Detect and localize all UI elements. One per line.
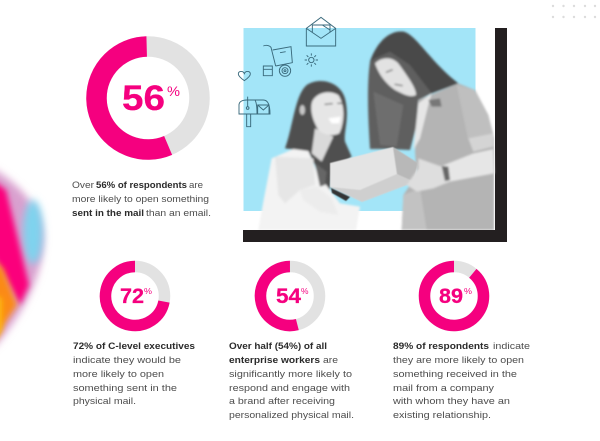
text: enterprise workers: enterprise workers bbox=[229, 354, 320, 365]
icon: heart bbox=[238, 71, 250, 81]
text: C-level executives: more likely to open bbox=[73, 368, 164, 379]
line icons bbox=[238, 17, 336, 127]
text: existing relationship bbox=[392, 340, 530, 420]
text: enterprise workers: a brand after receiving bbox=[229, 395, 335, 406]
text: enterprise workers: are bbox=[323, 354, 338, 365]
text: 56% of respondents: Over bbox=[72, 179, 94, 190]
text: existing relationship: they are more likely to open bbox=[393, 354, 524, 365]
text: 56% of respondents: 56% of respondents bbox=[96, 179, 187, 190]
icon: envelope bbox=[306, 17, 336, 46]
text: enterprise workers bbox=[229, 340, 354, 420]
icon: parcel cart bbox=[263, 45, 292, 76]
icon: mailbox bbox=[239, 97, 270, 127]
donut chart: 72% bbox=[100, 261, 170, 331]
large donut chart: 56%: 56 bbox=[122, 79, 165, 118]
large donut chart: 56%: % bbox=[167, 83, 180, 99]
decorative gradient blob bbox=[0, 168, 43, 350]
donut chart: 54%: 54 bbox=[276, 285, 301, 308]
large donut chart: 56% bbox=[80, 30, 216, 166]
text: existing relationship: 89% of respondents bbox=[393, 340, 489, 351]
donut chart: 54%: % bbox=[301, 287, 308, 296]
dot grid decoration bbox=[552, 5, 596, 18]
photo: right woman bbox=[368, 32, 494, 230]
donut chart: 89%: % bbox=[464, 287, 472, 296]
photo: right woman's hands and forearm bbox=[407, 149, 494, 192]
donut chart: 54% bbox=[254, 260, 326, 332]
text: enterprise workers: significantly more likely to bbox=[229, 368, 352, 379]
text: enterprise workers: personalized physical mail. bbox=[229, 409, 354, 420]
text: enterprise workers: respond and engage with bbox=[229, 382, 350, 393]
text: C-level executives: indicate they would be bbox=[73, 354, 181, 365]
photo: left woman bbox=[258, 81, 360, 230]
text: 56% of respondents: more likely to open something bbox=[72, 193, 209, 204]
donut chart: 72%: % bbox=[144, 287, 152, 296]
text: existing relationship: something received in the bbox=[393, 368, 517, 379]
text: 56% of respondents: sent in the mail bbox=[72, 207, 144, 218]
donut chart: 89% bbox=[412, 254, 496, 338]
photo: parcel box bbox=[330, 147, 418, 202]
text: existing relationship: with whom they have an bbox=[392, 395, 510, 406]
text: C-level executives: 72% of C-level executives bbox=[73, 340, 195, 351]
donut chart: 89%: 89 bbox=[439, 285, 463, 308]
text: existing relationship: mail from a company bbox=[393, 382, 494, 393]
text: C-level executives: physical mail. bbox=[73, 395, 136, 406]
donut chart: 72%: 72 bbox=[120, 285, 144, 308]
text: 56% of respondents bbox=[72, 179, 211, 218]
text: 56% of respondents: are bbox=[189, 179, 203, 190]
light blue backdrop bbox=[244, 28, 476, 211]
text: C-level executives: something sent in the bbox=[73, 382, 177, 393]
text: enterprise workers: Over half (54%) of all bbox=[229, 340, 327, 351]
icon: sun bbox=[305, 53, 318, 67]
text: existing relationship: indicate bbox=[493, 340, 530, 351]
text: 56% of respondents: than an email. bbox=[146, 207, 211, 218]
text: C-level executives bbox=[73, 340, 195, 406]
black frame bbox=[243, 28, 507, 242]
image panel: two women with a parcel bbox=[243, 28, 507, 242]
text: existing relationship: existing relationship. bbox=[393, 409, 491, 420]
